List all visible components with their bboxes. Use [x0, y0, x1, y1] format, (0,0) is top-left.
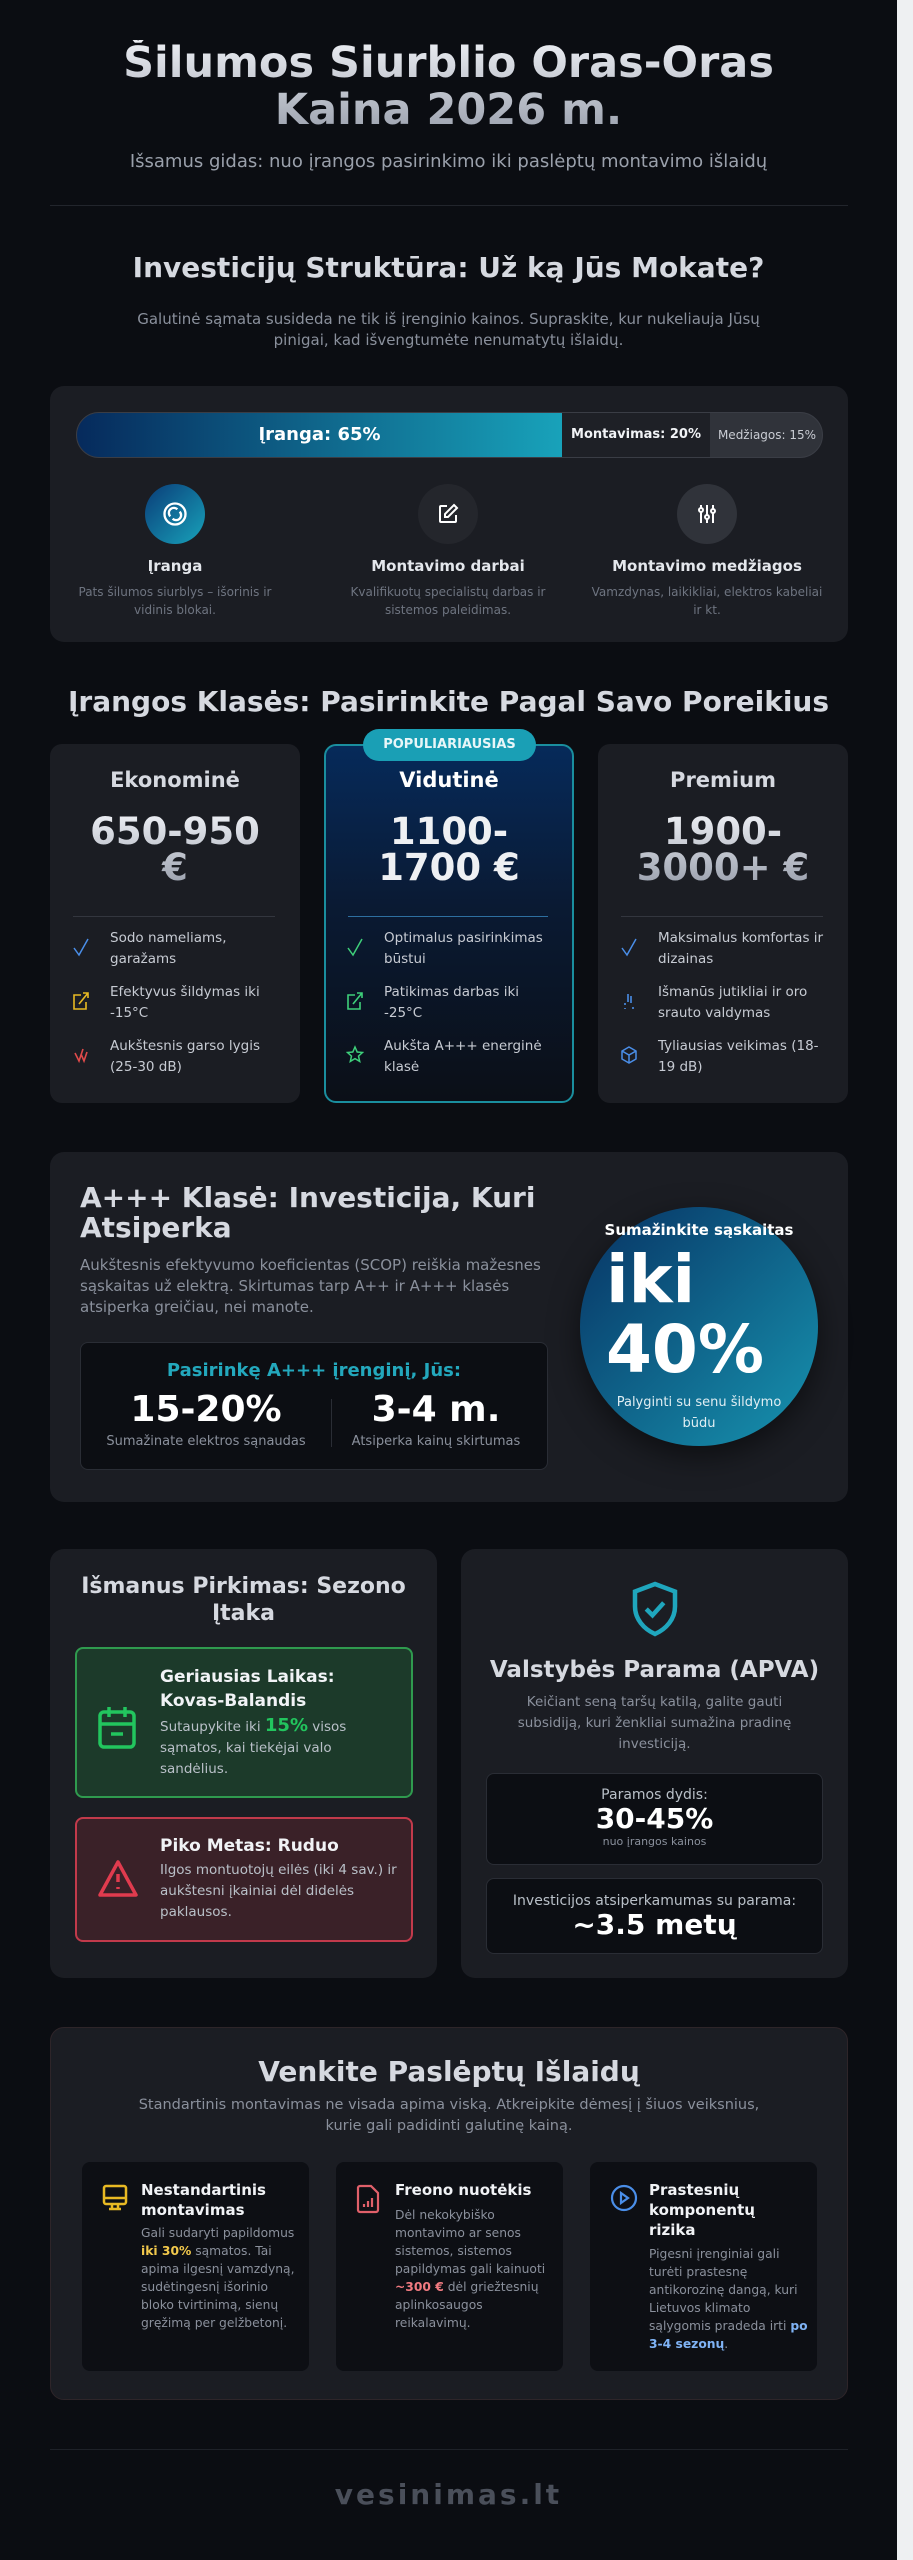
icon: sliders — [677, 484, 737, 544]
card: prastesnių komponentų — [590, 2162, 817, 2371]
icon: edit — [418, 484, 478, 544]
item: montavimo darbai: Montavimo darbai — [371, 557, 525, 575]
best time box: Sutaupykite iki 15% visos sąmatos, kai tiekėjai valo sandėlius. — [160, 1715, 346, 1777]
panel: state support: Keičiant seną taršų katilą, galite gauti subsidiją, kuri ženkliai sumažina pradinę investiciją. — [518, 1694, 791, 1752]
heading: investicijų struktūra: Investicijų Struktūra: Už ką Jūs Mokate? — [133, 251, 764, 284]
icon: calendar — [98, 1707, 136, 1749]
callout circle — [580, 1207, 818, 1446]
features: Tyliausias veikimas (18-19 dB) — [658, 1038, 819, 1075]
features: Aukštesnis garso lygis (25-30 dB) — [110, 1038, 260, 1075]
item: montavimo darbai — [350, 484, 546, 617]
callout circle: 40% — [606, 1311, 764, 1388]
heading: įrangos klasės: Įrangos Klasės: Pasirinkite Pagal Savo Poreikius — [68, 685, 829, 718]
panel: state support: Valstybės Parama (APVA) — [490, 1657, 819, 1683]
peak time box: Ilgos montuotojų eilės (iki 4 sav.) ir aukštesni įkainiai dėl didelės paklausos. — [160, 1862, 397, 1920]
card: freono: Dėl nekokybiško montavimo ar senos sistemos, sistemos papildymas gali kainuoti ~300 € dėl griežtesnių aplinkosaugos reikalavimų. — [395, 2208, 545, 2330]
card: ekonominė — [50, 744, 300, 1103]
features — [621, 930, 824, 1075]
item: montavimo medžiagos — [592, 484, 822, 617]
icon: file chart — [356, 2184, 380, 2214]
stats box: Pasirinkę A+++ įrenginį, Jūs: — [167, 1360, 461, 1381]
card: vidutinė (popular) — [324, 744, 574, 1103]
callout circle: Sumažinkite sąskaitas — [605, 1221, 793, 1239]
support amount box: nuo įrangos kainos — [603, 1835, 706, 1848]
best time box: Geriausias Laikas: Kovas-Balandis — [160, 1667, 335, 1711]
panel: hidden costs: Venkite Paslėptų Išlaidų — [258, 2055, 640, 2088]
card: vidutinė (popular): Vidutinė — [399, 768, 499, 792]
features — [346, 930, 543, 1075]
features: Išmanūs jutikliai ir oro srauto valdymas — [658, 984, 807, 1021]
features: Aukšta A+++ energinė klasė — [384, 1038, 542, 1075]
icon: warning — [98, 1860, 138, 1897]
card: prastesnių komponentų: Prastesnių komponentų rizika — [649, 2181, 755, 2239]
features: Efektyvus šildymas iki -15°C — [110, 984, 260, 1021]
footer brand: vesinimas.lt — [335, 2478, 562, 2511]
best time box — [75, 1647, 413, 1798]
stacked bar: Montavimas: 20% — [571, 427, 701, 442]
card: premium: Premium — [670, 768, 776, 792]
panel: cost structure — [50, 386, 848, 642]
text: Aukštesnis efektyvumo koeficientas (SCOP) reiškia mažesnes sąskaitas už elektrą. Skirtumas tarp A++ ir A+++ klasės atsiperka greičiau, nei manote. — [80, 1256, 541, 1316]
features — [73, 930, 260, 1075]
payback box: ~3.5 metų — [572, 1908, 737, 1941]
support amount box — [486, 1773, 823, 1865]
stats box: 15-20% — [130, 1389, 282, 1430]
peak time box — [75, 1817, 413, 1942]
payback box: Investicijos atsiperkamumas su parama: — [513, 1893, 796, 1909]
panel: state support — [461, 1549, 848, 1978]
card: ekonominė: 650-950 — [90, 810, 260, 853]
features: Patikimas darbas iki -25°C — [384, 984, 519, 1021]
stacked bar — [76, 412, 823, 458]
title — [0, 40, 897, 134]
stats box: 3-4 m. — [372, 1389, 500, 1430]
card: premium — [598, 744, 848, 1103]
support amount box: 30-45% — [596, 1802, 713, 1835]
item: montavimo medžiagos: Vamzdynas, laikikliai, elektros kabeliai ir kt. — [592, 585, 822, 617]
card: prastesnių komponentų: Pigesni įrenginiai gali turėti prastesnę antikorozinę dangą, kuri Lietuvos klimato sąlygomis pradeda irti po 3-4 sezonų. — [649, 2247, 808, 2351]
stats box: Sumažinate elektros sąnaudas — [106, 1434, 306, 1449]
card: vidutinė (popular): 1700 € — [378, 846, 520, 889]
payback box — [486, 1878, 823, 1954]
features: Maksimalus komfortas ir dizainas — [658, 930, 823, 967]
panel: hidden costs — [50, 2027, 848, 2400]
icon: play circle — [610, 2184, 638, 2212]
callout circle: iki — [606, 1241, 695, 1318]
panel: hidden costs: Standartinis montavimas ne visada apima viską. Atkreipkite dėmesį į šiuos veiksnius, kurie gali padidinti galutinę kainą. — [139, 2097, 759, 2134]
peak time box: Piko Metas: Ruduo — [160, 1836, 339, 1856]
intro text: Galutinė sąmata susideda ne tik iš įrenginio kainos. Supraskite, kur nukeliauja Jūsų pinigai, kad išvengtumėte nenumatytų išlaidų. — [137, 310, 760, 349]
panel: A+++ — [50, 1152, 848, 1502]
support amount box: Paramos dydis: — [601, 1787, 708, 1803]
subtitle: Išsamus gidas: nuo įrangos pasirinkimo iki paslėptų montavimo išlaidų — [130, 151, 767, 172]
item: įranga: Įranga — [148, 557, 202, 575]
card: nestandartinis: Nestandartinis montavimas — [141, 2181, 266, 2219]
card: ekonominė: € — [162, 846, 188, 889]
item: įranga — [78, 484, 272, 617]
panel: season — [50, 1549, 437, 1978]
title: Kaina 2026 m. — [275, 85, 622, 135]
icon: monitor — [102, 2184, 128, 2210]
features: Sodo nameliams, garažams — [110, 930, 226, 967]
badge: POPULIARIAUSIAS — [383, 737, 516, 752]
icon: equipment — [145, 484, 205, 544]
card: ekonominė: Ekonominė — [110, 768, 240, 792]
stats box: Atsiperka kainų skirtumas — [352, 1434, 520, 1449]
features: Optimalus pasirinkimas būstui — [384, 930, 543, 967]
stacked bar: Įranga: 65% — [258, 424, 381, 445]
callout circle: Palyginti su senu šildymo būdu — [617, 1395, 781, 1431]
heading: A+++ Klasė: Investicija, Kuri Atsiperka — [80, 1181, 535, 1244]
item: įranga: Pats šilumos siurblys – išorinis ir vidinis blokai. — [78, 585, 271, 617]
card: vidutinė (popular): 1100- — [390, 810, 508, 853]
stats box — [80, 1342, 548, 1470]
card: freono: Freono nuotėkis — [395, 2181, 531, 2199]
card: premium: 3000+ € — [637, 846, 809, 889]
icon: shield — [632, 1582, 678, 1636]
badge — [363, 729, 536, 761]
card: freono — [336, 2162, 563, 2371]
card: nestandartinis — [82, 2162, 309, 2371]
stacked bar: Medžiagos: 15% — [718, 428, 816, 442]
panel: season: Išmanus Pirkimas: Sezono Įtaka — [81, 1574, 406, 1626]
item: montavimo medžiagos: Montavimo medžiagos — [612, 557, 802, 575]
card: nestandartinis: Gali sudaryti papildomus iki 30% sąmatos. Tai apima ilgesnį vamzdyną, sudėtingesnį išorinio bloko tvirtinimą, sienų gręžimą per gelžbetonį. — [141, 2226, 294, 2330]
title: Šilumos Siurblio Oras-Oras — [123, 38, 774, 88]
card: premium: 1900- — [664, 810, 782, 853]
item: montavimo darbai: Kvalifikuotų specialistų darbas ir sistemos paleidimas. — [350, 585, 546, 617]
